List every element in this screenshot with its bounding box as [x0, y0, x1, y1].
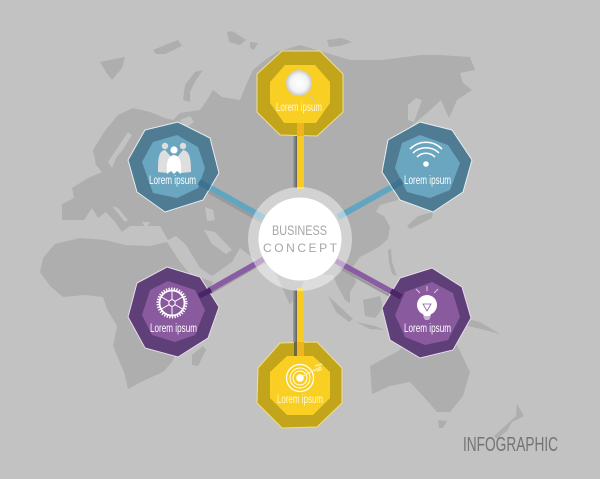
connector overlap: yellow top	[297, 123, 304, 136]
connector: blue right	[338, 187, 392, 217]
center heading	[263, 222, 338, 255]
center heading: CONCEPT	[263, 241, 338, 255]
label: blue right: Lorem ipsum	[404, 175, 451, 187]
icon: people	[158, 143, 191, 174]
center circle	[248, 187, 352, 291]
node: yellow top	[257, 51, 343, 136]
connector: yellow bottom	[293, 288, 304, 356]
connector overlap: yellow bottom	[294, 342, 304, 356]
icon: magnifier	[286, 70, 316, 102]
center heading: BUSINESS	[272, 222, 327, 238]
icon: wifi	[410, 142, 442, 167]
icon: gear	[158, 289, 186, 317]
node: purple right	[382, 268, 471, 358]
connector overlap: purple right	[391, 291, 401, 297]
node: purple left	[128, 267, 219, 357]
world map	[40, 31, 524, 439]
node: blue right	[382, 122, 472, 212]
node: yellow bottom	[257, 342, 342, 428]
label: blue left: Lorem ipsum	[149, 175, 196, 187]
connector overlap: blue right	[392, 181, 402, 187]
connector overlap: blue left	[199, 182, 210, 188]
connector overlap: purple left	[199, 290, 211, 296]
connector: purple left	[205, 259, 264, 296]
connector: purple right	[336, 261, 394, 297]
label: purple right: Lorem ipsum	[404, 323, 451, 335]
label: yellow bottom: Lorem ipsum	[277, 394, 323, 406]
connector: blue left	[198, 182, 266, 222]
icon: light bulb	[416, 286, 438, 320]
label: yellow top: Lorem ipsum	[276, 102, 322, 114]
map seas	[108, 98, 422, 264]
label: purple left: Lorem ipsum	[150, 323, 197, 335]
connector: yellow top	[293, 125, 304, 189]
icon: target	[286, 364, 322, 392]
node: blue left	[128, 122, 219, 212]
